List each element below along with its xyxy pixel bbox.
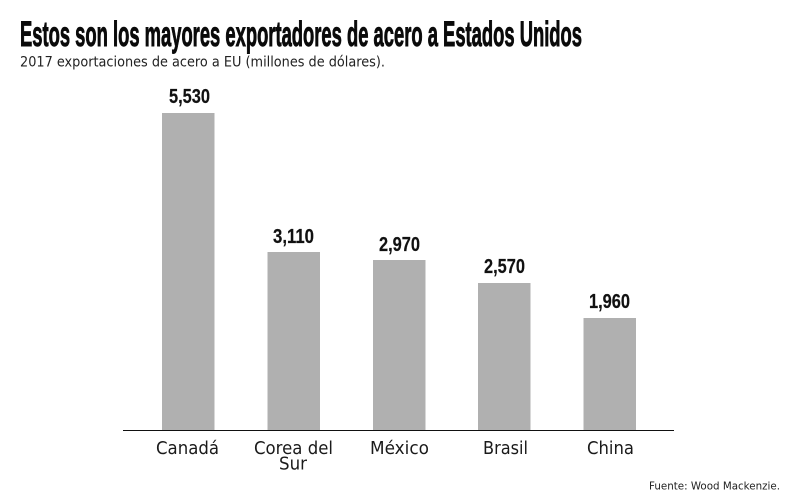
- bar: Corea del Sur: Corea del: [254, 439, 333, 459]
- subtitle: 2017 exportaciones de acero a EU (millones de dólares).: [20, 54, 385, 70]
- bar: China: China: [587, 439, 634, 459]
- bar: Canadá: 5,530: [169, 86, 210, 108]
- bar: Canadá: Canadá: [156, 439, 219, 459]
- bar: China: [584, 291, 636, 459]
- bar: Brasil: [478, 256, 530, 459]
- axis line: [123, 430, 674, 431]
- bar: México: México: [370, 439, 429, 459]
- bar: Corea del Sur: Sur: [279, 454, 308, 474]
- bar chart: [123, 86, 674, 474]
- bar: Brasil: Brasil: [483, 439, 528, 459]
- bar: México: 2,970: [379, 234, 420, 256]
- bar: Brasil: 2,570: [484, 256, 525, 278]
- source note: Fuente: Wood Mackenzie.: [649, 480, 780, 492]
- bar: Corea del Sur: [254, 226, 333, 474]
- bar: México: [370, 234, 429, 459]
- bar: Canadá: [156, 86, 219, 459]
- bar: Corea del Sur: 3,110: [273, 226, 314, 248]
- bar: China: 1,960: [589, 291, 630, 313]
